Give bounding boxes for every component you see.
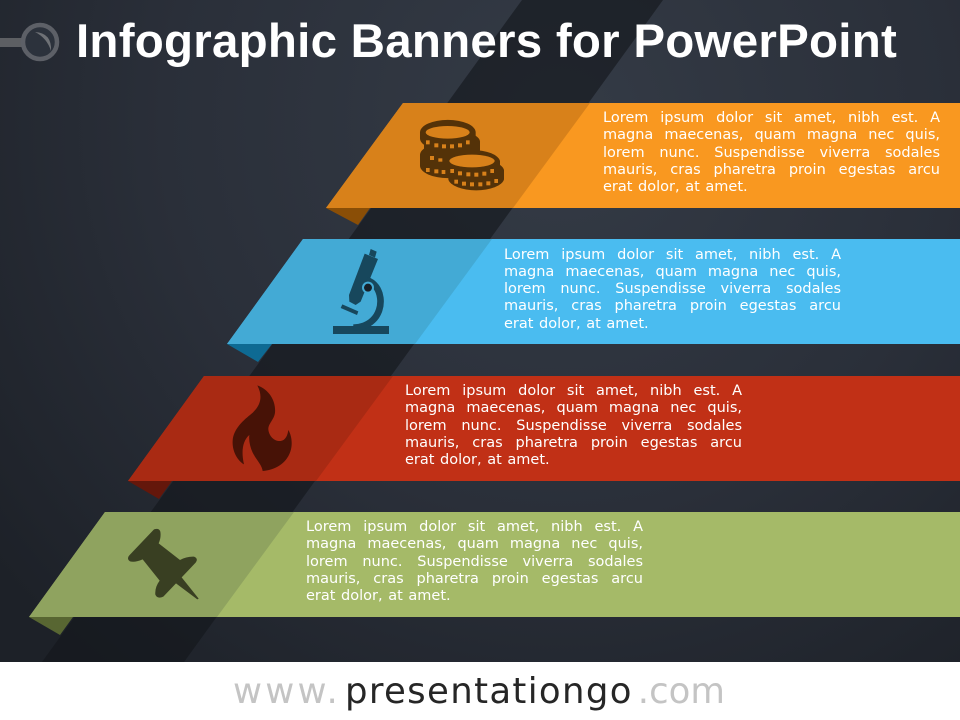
text block: blue: mauris, cras pharetra proin egestas arcu: [504, 298, 841, 314]
icon: microscope: [333, 249, 389, 334]
text block: green: magna maecenas, quam magna nec quis,: [306, 536, 643, 552]
text block: red: Lorem ipsum dolor sit amet, nibh est. A: [405, 383, 742, 399]
text block: blue: lorem nunc. Suspendisse viverra sodales: [504, 281, 841, 297]
footer url: www.presentationgo.com: [233, 671, 725, 712]
text block: blue: magna maecenas, quam magna nec quis,: [504, 264, 841, 280]
text block: green: Lorem ipsum dolor sit amet, nibh est. A: [306, 519, 643, 535]
text block: red: erat dolor, at amet.: [405, 452, 550, 468]
icon: coins: [420, 120, 504, 190]
banner: orange: [326, 103, 960, 225]
text block: blue: [504, 246, 841, 332]
text block: green: [306, 519, 643, 604]
text block: orange: lorem nunc. Suspendisse viverra sodales: [603, 144, 940, 160]
text block: green: erat dolor, at amet.: [306, 588, 451, 604]
diagonal shadow band: [42, 0, 663, 662]
footer: [0, 662, 960, 720]
text block: green: lorem nunc. Suspendisse viverra sodales: [306, 554, 643, 570]
text block: red: magna maecenas, quam magna nec quis,: [405, 400, 742, 416]
text block: orange: erat dolor, at amet.: [603, 179, 748, 195]
text block: green: mauris, cras pharetra proin egestas arcu: [306, 571, 643, 587]
icon: push pin: [128, 529, 199, 599]
text block: orange: mauris, cras pharetra proin egestas arcu: [603, 162, 940, 178]
title: Infographic Banners for PowerPoint: [76, 15, 897, 68]
text block: red: mauris, cras pharetra proin egestas arcu: [405, 435, 742, 451]
banner: green: [29, 512, 960, 635]
text block: blue: Lorem ipsum dolor sit amet, nibh est. A: [504, 246, 841, 262]
text block: orange: magna maecenas, quam magna nec quis,: [603, 127, 940, 143]
banner: red: [128, 376, 960, 499]
text block: red: [405, 383, 742, 468]
text block: blue: erat dolor, at amet.: [504, 316, 649, 332]
icon: flame: [233, 385, 292, 471]
banner: blue: [227, 239, 960, 362]
text block: orange: [603, 110, 940, 195]
logo: ring: [0, 25, 57, 59]
text block: red: lorem nunc. Suspendisse viverra sodales: [405, 418, 742, 434]
text block: orange: Lorem ipsum dolor sit amet, nibh est. A: [603, 110, 940, 126]
